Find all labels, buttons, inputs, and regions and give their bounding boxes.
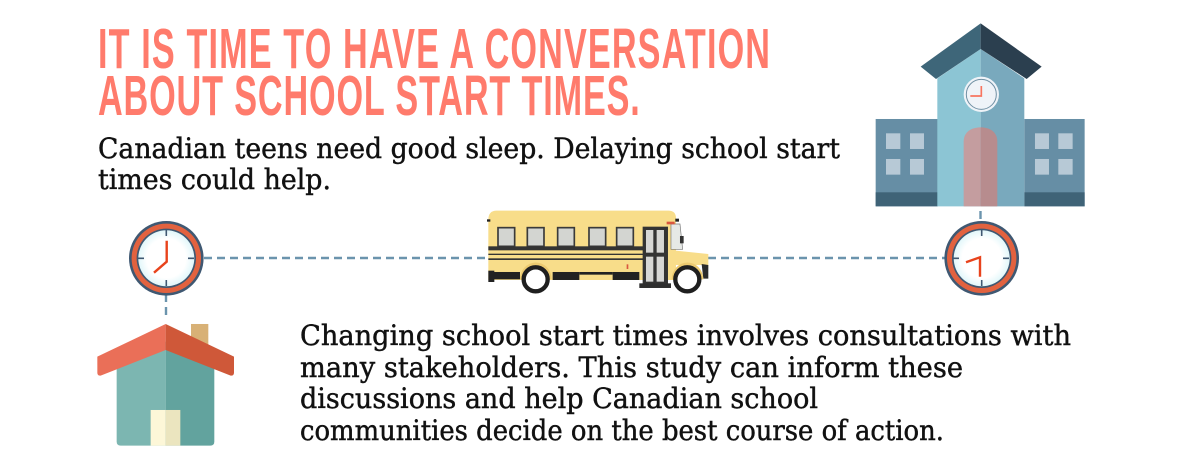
title: IT IS TIME TO HAVE A CONVERSATION: [98, 16, 770, 80]
intro text: [98, 132, 841, 196]
title: [98, 16, 770, 127]
body text: many stakeholders. This study can inform these: [300, 351, 963, 384]
icon: school building: [876, 23, 1085, 206]
dashed timeline: [166, 198, 980, 318]
body text: Changing school start times involves consultations with: [300, 319, 1071, 352]
icon: clock morning: [129, 221, 204, 296]
body text: communities decide on the best course of action.: [300, 414, 944, 447]
body text: discussions and help Canadian school: [300, 382, 818, 415]
icon: clock later: [944, 221, 1019, 296]
title: ABOUT SCHOOL START TIMES.: [98, 63, 640, 127]
intro text: Canadian teens need good sleep. Delaying school start: [98, 132, 841, 165]
icon: house: [97, 324, 234, 446]
body text: [300, 319, 1071, 447]
icon: school bus: [487, 211, 708, 291]
intro text: times could help.: [98, 163, 331, 196]
